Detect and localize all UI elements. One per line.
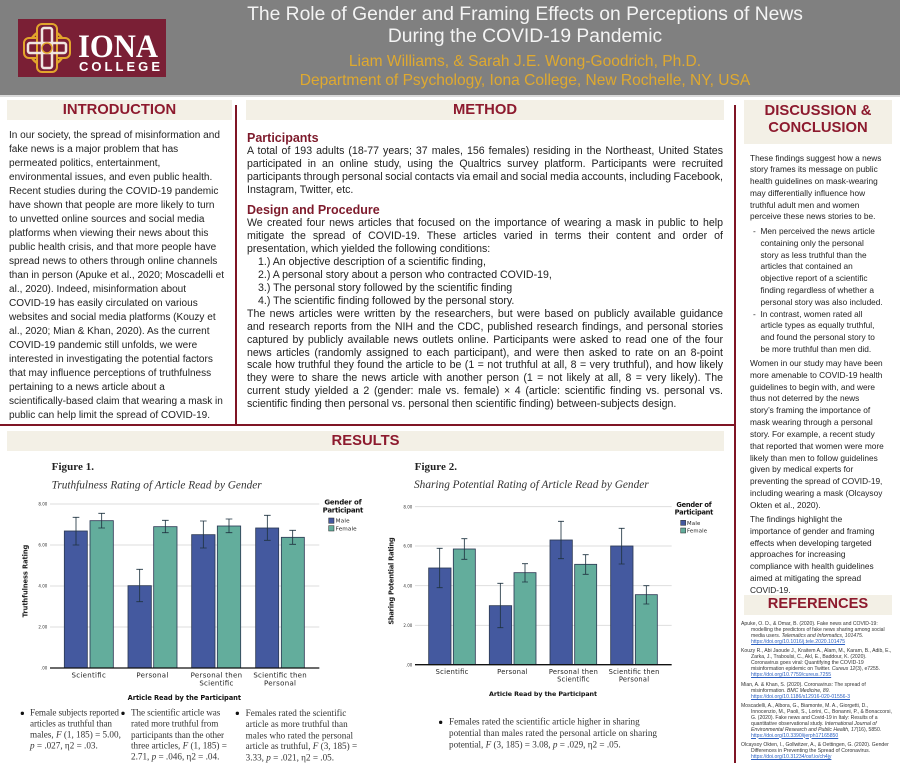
authors and affiliation: Liam Williams, & Sarah J.E. Wong-Goodrich, Ph.D. — [349, 52, 701, 70]
authors and affiliation: Department of Psychology, Iona College, New Rochelle, NY, USA — [300, 72, 750, 89]
conclusion paragraph: aimed at mitigating the spread — [750, 573, 861, 583]
discussion bullets: finding regardless of whether a — [760, 285, 874, 295]
introduction text: environmental issues, and even public health. — [9, 172, 212, 182]
introduction text: scientifically-based claim that wearing a mask in — [9, 396, 223, 406]
discussion bullets: and found the personal story to — [760, 332, 875, 342]
poster title: The Role of Gender and Framing Effects on Perceptions of News — [247, 4, 803, 24]
figure 1: truthfulness bar chart: 8.00 — [38, 502, 48, 507]
introduction text: public can help limit the spread of COVID-19. — [9, 410, 210, 420]
figure 2: sharing potential bar chart: Gender of — [676, 501, 712, 509]
figure 1: truthfulness bar chart: 2.00 — [38, 625, 48, 630]
text: Sharing Potential Rating — [388, 537, 396, 625]
introduction text: Recent studies during the COVID-19 pandemic — [9, 186, 218, 196]
references list: Mian, A. & Khan, S. (2020). Coronavirus: The spread of — [741, 682, 866, 688]
references list: Coronavirus goes viral: Quantifying the COVID-19 — [751, 660, 864, 666]
discussion bullets: article types as equally truthful, — [760, 320, 874, 330]
discussion paragraph: women: including wearing a mask (Olcaysoy — [750, 488, 882, 498]
heading: method: METHOD — [453, 102, 517, 118]
discussion bullets: personal story was also included. — [760, 297, 883, 307]
conclusion paragraph: importance of gender and framing — [750, 526, 875, 536]
references list: G. (2020). Fake news and Covid-19 in Italy: Results of a — [751, 715, 878, 721]
panel: introduction — [7, 100, 232, 420]
figure 1: truthfulness bar chart: Male — [336, 519, 350, 525]
introduction text — [9, 130, 224, 420]
discussion paragraph: women — [750, 358, 884, 510]
references list: https://doi.org/10.1186/s12916-020-01556-3 — [751, 694, 850, 700]
references list: https://doi.org/10.7759/cureus.7255 — [751, 672, 831, 678]
figure 1: truthfulness bar chart: Personal — [264, 679, 296, 687]
figure 1: truthfulness bar chart: Scientific — [72, 671, 106, 679]
figure 1: truthfulness bar chart: Article Read by the Participant — [128, 694, 242, 702]
conclusion paragraph: compliance with health guidelines — [750, 561, 874, 571]
heading: method — [246, 100, 724, 120]
discussion bullets — [760, 226, 883, 354]
discussion paragraph: women: Women in our study may have been — [750, 358, 883, 368]
design and procedure text: We created four news articles that focused on the importance of wearing a mask in public to help — [247, 217, 723, 229]
heading: discussion and conclusion: CONCLUSION — [768, 120, 868, 136]
figure 2: sharing potential bar chart: Scientific then — [609, 668, 659, 676]
design and procedure text: current study yielded a 2 (gender: male vs. female) × 4 (article: scientific finding vs. personal vs. — [247, 385, 723, 397]
figure 2: sharing potential bar chart: Figure 2. — [415, 461, 457, 473]
heading: discussion and conclusion: DISCUSSION & — [765, 102, 871, 118]
figure 1 findings: Female subjects reported — [30, 708, 119, 718]
participants text: participants through personal social contacts via email and social media accounts, including Facebook, — [247, 171, 723, 183]
header banner — [0, 0, 900, 97]
design and procedure text: 4.) The scientific finding followed by the personal story. — [258, 295, 514, 307]
references list: misinformation. BMC Medicine, 89. — [751, 688, 830, 694]
figure 1 findings: participants than the other — [131, 730, 224, 740]
references list: https://doi.org/10.1016/j.tele.2020.101475 — [751, 639, 845, 645]
introduction text: spread news to others through online channels — [9, 256, 217, 266]
figure 2: sharing potential bar chart: Sharing Potential Rating of Article Read by Gender — [414, 478, 649, 491]
references list: modelling the predictors of fake news sharing among social — [751, 627, 885, 633]
introduction text: public health crisis, and that more people have — [9, 242, 216, 252]
figure 2: sharing potential bar chart: .00 — [406, 663, 413, 668]
discussion paragraph: women: thus not deterred by the news — [750, 393, 859, 403]
figure 1 findings: article as more truthful than — [246, 719, 348, 729]
figure 1: truthfulness bar chart: Truthfulness Rating of Article Read by Gender — [52, 479, 262, 492]
logo: Iona College — [18, 19, 166, 77]
discussion paragraph: women: Okten et al., 2020). — [750, 500, 821, 510]
discussion intro text: may differentially influence how — [750, 188, 865, 198]
bullet dashes: - — [753, 309, 756, 319]
introduction text: websites and social media platforms (Kouzy et — [9, 312, 216, 322]
figure 1: truthfulness bar chart: Female — [336, 526, 357, 532]
figure 1 findings: males who rated the personal — [246, 730, 353, 740]
design and procedure text: captured by publicly available news outlets online. Participants were asked to read one of the four — [247, 334, 723, 346]
design and procedure text: and research reports from the NIH and the CDC, published research findings, and personal stories — [247, 321, 723, 333]
figure 2: sharing potential bar chart — [388, 461, 714, 698]
figure 2: sharing potential bar chart: Scientific — [557, 676, 590, 684]
figure 1 findings: 3.33, p = .021, η2 = .05. — [246, 752, 334, 762]
heading: discussion and conclusion — [744, 100, 892, 144]
figure 2: sharing potential bar chart: Scientific — [436, 668, 469, 676]
participants text: Instagram, Twitter, etc. — [247, 184, 353, 196]
figure 2: sharing potential bar chart: Personal then — [549, 668, 598, 676]
conclusion paragraph: effects when developing targeted — [750, 538, 872, 548]
references list: quantitative observational study. International Journal of — [751, 721, 877, 727]
conclusion paragraph: approaches for increasing — [750, 549, 845, 559]
figure 1: truthfulness bar chart: Figure 1. — [52, 461, 94, 473]
introduction text: COVID-19 pandemic still unfolds, we were — [9, 340, 197, 350]
design and procedure text: 1.) An objective description of a scientific finding, — [258, 256, 486, 268]
introduction text: to unvetted online sources and social media — [9, 214, 204, 224]
figure 2: sharing potential bar chart: 6.00 — [403, 544, 413, 549]
discussion intro text: truthful adult men and women — [750, 200, 859, 210]
references list: misinformation epidemic on Twitter. Cureus 12(3), e7255. — [751, 666, 880, 672]
figure 2 findings — [439, 717, 657, 750]
subheading: design and procedure: Design and Procedure — [247, 202, 380, 216]
figure 1 findings: articles as truthful than — [30, 719, 112, 729]
introduction text: In our society, the spread of misinformation and — [9, 130, 220, 140]
discussion bullets: containing only the personal — [760, 238, 864, 248]
design and procedure text: scale how truthful they found the article to be (1 = not truthful at all, 8 = very truthful), and how likely — [247, 359, 723, 371]
design and procedure text: news articles (randomly assigned to each participant), and were then asked to rate on an 8-point — [247, 347, 723, 359]
figure 1: truthfulness bar chart: .00 — [41, 666, 48, 671]
introduction text: interested in investigating the potential factors — [9, 354, 213, 364]
references list: Environmental Research and Public Health, 17(16), 5850. — [751, 727, 881, 733]
heading: results — [7, 431, 724, 451]
figure 1: truthfulness bar chart — [21, 461, 364, 702]
heading: introduction — [7, 100, 232, 120]
logo: Iona College: COLLEGE — [79, 59, 160, 74]
figure 1: truthfulness bar chart: Personal — [136, 671, 168, 679]
logo: Iona College: IONA — [78, 29, 158, 65]
discussion paragraph: women: more amenable to COVID-19 health — [750, 370, 882, 380]
figure 2: sharing potential bar chart: Participant — [675, 509, 714, 517]
poster title: During the COVID-19 Pandemic — [388, 26, 662, 47]
conclusion paragraph: The findings highlight the — [750, 514, 842, 524]
references list: Olcaysoy Okten, I., Gollwitzer, A., & Oettingen, G. (2020). Gender — [741, 742, 889, 748]
introduction text: permeated politics, entertainment, — [9, 158, 160, 168]
panel: discussion and conclusion — [744, 100, 892, 595]
figure 2: sharing potential bar chart: Personal — [497, 668, 528, 676]
participants text: participated in an online study, using the Qualtrics survey platform. Participants were recruited — [247, 158, 723, 170]
design and procedure text: 3.) The personal story followed by the scientific finding — [258, 282, 512, 294]
discussion paragraph: women: that reported that women were more — [750, 441, 884, 451]
references list: Kouzy R., Abi Jaoude J., Kraitem A., Alam, M., Karam, B., Adib, E., — [741, 648, 891, 654]
figure 2: sharing potential bar chart: Article Read by the Participant — [489, 691, 597, 698]
references list: https://doi.org/10.31234/osf.io/ch4jy — [751, 754, 831, 760]
design and procedure text: 2.) A personal story about a person who contracted COVID-19, — [258, 269, 552, 281]
references list: media users. Telematics and Informatics, 101475. — [751, 633, 863, 639]
figure 2 findings: potential, F (3, 185) = 3.08, p = .029, η2 = .05. — [449, 739, 621, 749]
introduction text: than in person (Apuke et al., 2020; Moscadelli et — [9, 270, 224, 280]
design and procedure text: they were to share the news article with another person (1 = not likely at all, 8 = very likely). The — [247, 372, 723, 384]
references list: https://doi.org/10.3390/ijerph17165850 — [751, 733, 838, 739]
discussion intro text: story frames its message on public — [750, 164, 878, 174]
authors and affiliation — [300, 52, 750, 89]
figure 1: truthfulness bar chart: Truthfulness Rating — [21, 544, 29, 617]
figure 1: truthfulness bar chart: 6.00 — [38, 543, 48, 548]
figure 2: sharing potential bar chart: Male — [687, 521, 700, 527]
introduction text: fake news is a major problem that has — [9, 144, 178, 154]
figure 2: sharing potential bar chart: 4.00 — [403, 583, 413, 588]
introduction text: COVID-19 has easily circulated on various — [9, 298, 198, 308]
discussion intro text: perceive these news stories to be. — [750, 211, 875, 221]
references list: Apuke, O. D., & Omar, B. (2020). Fake news and COVID-19: — [741, 621, 878, 627]
discussion paragraph: women: story. For example, a recent study — [750, 429, 875, 439]
figure 2: sharing potential bar chart: Personal — [619, 676, 649, 684]
figure 1 findings: males, F (1, 185) = 5.00, — [30, 730, 121, 740]
figure 2: sharing potential bar chart: Female — [687, 528, 707, 534]
discussion bullets: In contrast, women rated all — [760, 309, 862, 319]
introduction text: that may influence perceptions of truthfulness — [9, 368, 211, 378]
design and procedure text: mitigate the spread of COVID-19. These articles varied in terms their content and order of — [247, 230, 723, 242]
introduction text: al., 2020; Mian & Khan, 2020). As the current — [9, 326, 210, 336]
discussion bullets: story as less truthful than the — [760, 250, 867, 260]
design and procedure text: The news articles were written by the researchers, but were based on publicly available guidance — [247, 308, 723, 320]
discussion paragraph: women: preventing the spread of COVID-19, — [750, 476, 882, 486]
conclusion paragraph: COVID-19. — [750, 585, 791, 595]
discussion paragraph: women: story’s framing the importance of — [750, 405, 870, 415]
discussion bullets: objective report of a scientific — [760, 273, 868, 283]
heading: references — [744, 595, 892, 615]
figure 1 findings: p = .027, η2 = .03. — [29, 741, 98, 751]
figure 1: truthfulness bar chart: Scientific — [199, 679, 233, 687]
references list: Moscadelli, A., Albora, G., Biamonte, M. A., Giorgetti, D., — [741, 703, 868, 709]
figure 2: sharing potential bar chart: 2.00 — [403, 623, 413, 628]
design and procedure text — [247, 217, 723, 410]
bullet dashes — [753, 226, 756, 319]
references list: Differences in Preventing the Spread of Coronavirus. — [751, 748, 870, 754]
divider: intro column — [234, 105, 236, 425]
subheading: participants: Participants — [247, 130, 319, 144]
discussion paragraph: women: mask wearing through a personal — [750, 417, 873, 427]
divider: right column — [734, 105, 736, 763]
figure 1 findings — [20, 708, 357, 762]
figure 1: truthfulness bar chart: Personal then — [191, 671, 242, 679]
figure 2: sharing potential bar chart: 8.00 — [403, 504, 413, 509]
figure 2 findings: Females rated the scientific article higher in sharing — [449, 717, 640, 727]
discussion paragraph: women: likely than men to follow guidelines — [750, 453, 878, 463]
references list: Zarka, J., Traboulsi, C., Akl, E., Baddour, K. (2020). — [751, 654, 867, 660]
discussion paragraph: women: given by medical experts for — [750, 464, 853, 474]
figure 1: truthfulness bar chart: Participant — [323, 507, 364, 515]
figure 1 findings: 2.71, p = .046, η2 = .04. — [131, 751, 219, 761]
figure 1 findings: three articles, F (1, 185) = — [131, 741, 227, 751]
discussion intro text — [750, 152, 882, 221]
references list — [741, 621, 892, 760]
figure 1: truthfulness bar chart: Gender of — [324, 499, 363, 507]
design and procedure text: scientific finding then personal vs. personal then scientific finding) between-subjects design. — [247, 398, 676, 410]
poster title — [247, 4, 803, 47]
discussion paragraph: women: guidelines to begin with, and were — [750, 382, 875, 392]
figure 2 findings: potential than males rated the personal article on sharing — [449, 728, 657, 738]
figure 1 findings: Females rated the scientific — [246, 708, 346, 718]
discussion intro text: health guidelines on mask-wearing — [750, 176, 878, 186]
discussion intro text: These findings suggest how a news — [750, 152, 881, 162]
heading: introduction: INTRODUCTION — [63, 102, 176, 118]
introduction text: have shown that people are more likely to turn — [9, 200, 215, 210]
figure 1 findings: rated more truthful from — [131, 719, 218, 729]
introduction text: al., 2020). Indeed, misinformation about — [9, 284, 186, 294]
conclusion paragraph — [750, 514, 875, 595]
references list: Innocenzio, M., Paoli, S., Lorini, C., Bonanni, P., & Bonaccorsi, — [751, 709, 892, 715]
bullet dashes: - — [753, 226, 756, 236]
figure 1: truthfulness bar chart: 4.00 — [38, 584, 48, 589]
figure 1 findings: The scientific article was — [131, 708, 221, 718]
discussion bullets: be more truthful than men did. — [760, 344, 871, 354]
participants text: A total of 193 adults (18-77 years; 37 males, 156 females) residing in the Northeast, United States — [247, 145, 723, 157]
introduction text: platforms when viewing their news about this — [9, 228, 208, 238]
heading: results: RESULTS — [332, 433, 399, 449]
discussion bullets: articles that contained an — [760, 261, 853, 271]
discussion bullets: Men perceived the news article — [760, 226, 875, 236]
divider: results — [0, 424, 735, 426]
figure 1 findings: article as truthful, F (3, 185) = — [246, 741, 357, 751]
panel: method — [246, 100, 724, 410]
figure 1: truthfulness bar chart: Scientific then — [253, 671, 307, 679]
design and procedure text: presentation, which yielded the following conditions: — [247, 243, 490, 255]
introduction text: pertaining to a news article about a — [9, 382, 165, 392]
heading: references: REFERENCES — [768, 596, 868, 612]
participants text — [247, 145, 723, 196]
